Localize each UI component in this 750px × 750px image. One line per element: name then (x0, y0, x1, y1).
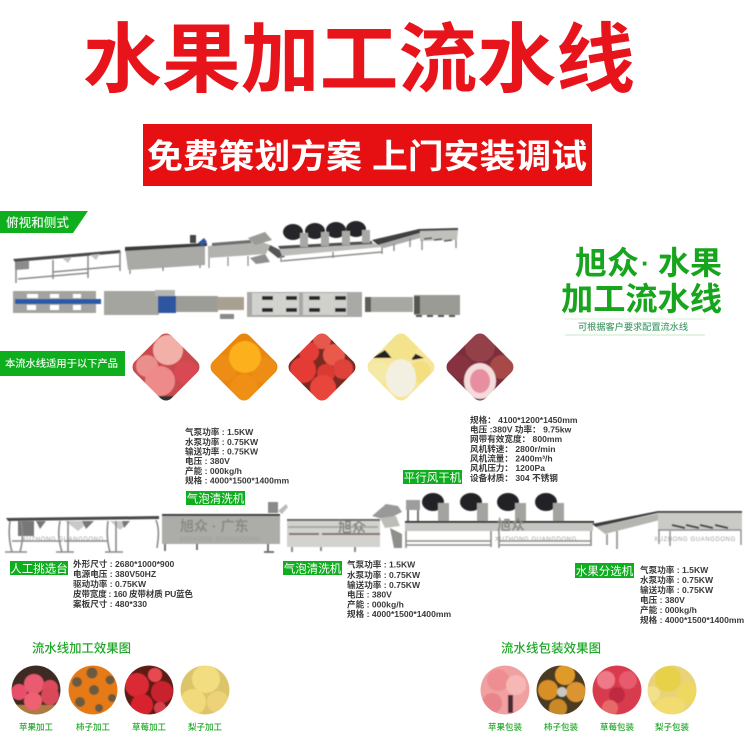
spec: bubble washer two: 输送功率 : 0.75KW (347, 579, 421, 590)
spec: fruit sorter: 规格 : 4000*1500*1400mm (640, 614, 745, 625)
heading: packaging results: 流水线包装效果图 (501, 640, 601, 656)
icon: oranges diamond (210, 334, 278, 400)
icon: packaged persimmons (536, 665, 586, 717)
spec: manual sorting table: 皮带宽度 : 160 皮带材质 PU蓝色 (73, 588, 193, 599)
captions: packaging: 苹果包装 (488, 722, 522, 732)
machine line plan view (13, 290, 460, 319)
brand heading (561, 245, 722, 335)
spec: parallel dryer: 风机压力： 1200Pa (470, 462, 545, 473)
inclined conveyor machine (592, 511, 662, 549)
brand heading: 加工流水线 (561, 281, 722, 317)
badge: manual sorting table: 人工挑选台 (10, 562, 68, 576)
plan: dryer (247, 292, 362, 317)
badge: applicable products (0, 351, 125, 376)
sorting table machine (5, 516, 159, 552)
spec: bubble washer two: 产能 : 000kg/h (347, 598, 404, 610)
spec: bubble washer one: 水泵功率 : 0.75KW (185, 436, 259, 447)
air dryer machine (405, 493, 594, 548)
spec: fruit sorter: 电压 : 380V (640, 594, 685, 605)
spec: fruit sorter: 气泵功率 : 1.5KW (640, 564, 709, 575)
captions: processing: 苹果加工 (19, 722, 53, 732)
captions: packaging (488, 722, 689, 732)
heading: processing results: 流水线加工效果图 (32, 640, 131, 656)
badge: bubble washer lower: 气泡清洗机 (284, 562, 342, 576)
icon: processed strawberries (124, 665, 174, 716)
spec: bubble washer two: 规格 : 4000*1500*1400mm (347, 608, 452, 619)
badge: bubble washer upper: 气泡清洗机 (187, 492, 245, 506)
icon: pears diamond (368, 334, 434, 400)
plan: washer (104, 290, 244, 319)
plan: sorting table (13, 291, 101, 313)
spec: parallel dryer: 网带有效宽度： 800mm (470, 433, 563, 444)
captions: packaging: 梨子包装 (655, 722, 689, 732)
red banner (143, 124, 592, 186)
icon: packaged pears (648, 666, 696, 714)
sorting table machine: XUZHONG GUANGDONG (22, 537, 104, 543)
spec: parallel dryer: 电压 :380V 功率： 9.75kw (470, 424, 572, 434)
title: 水果加工流水线 (83, 18, 635, 103)
spec: bubble washer two (347, 558, 452, 619)
icon: packaged strawberries (592, 665, 642, 716)
air dryer machine: 旭众 (497, 517, 525, 533)
captions: processing (19, 722, 222, 732)
badge: top and side views: 俯视和侧式 (6, 215, 69, 230)
spec: bubble washer one: 气泵功率 : 1.5KW (185, 426, 254, 437)
red banner: 免费策划方案 上门安装调试 (147, 139, 587, 176)
second washer machine (287, 504, 402, 552)
spec: manual sorting table: 驱动功率 : 0.75KW (73, 578, 147, 589)
washer (125, 235, 207, 274)
spec: bubble washer one (185, 426, 290, 486)
second washer machine: 旭众 (338, 519, 366, 535)
spec: bubble washer two: 电压 : 380V (347, 588, 392, 600)
fruit sorter machine: XUZHONG GUANGDONG (654, 537, 736, 543)
spec: bubble washer one: 输送功率 : 0.75KW (185, 446, 259, 456)
spec: parallel dryer: 规格： 4100*1200*1450mm (470, 414, 578, 425)
spec: parallel dryer: 风机流量： 2400m³/h (470, 452, 553, 464)
spec: fruit sorter: 水泵功率 : 0.75KW (640, 574, 714, 585)
spec: bubble washer two: 水泵功率 : 0.75KW (347, 569, 421, 580)
badge: top and side views (0, 211, 88, 233)
spec: manual sorting table: 案板尺寸 : 480*330 (73, 598, 147, 609)
bubble washer machine: 旭众 · 广东 (180, 518, 248, 534)
spec: bubble washer one: 规格 : 4000*1500*1400mm (185, 474, 290, 486)
spec: bubble washer one: 电压 : 380V (185, 455, 230, 466)
brand heading: 旭众 (575, 245, 639, 281)
fruit sorter machine (654, 511, 742, 546)
spec: fruit sorter: 输送功率 : 0.75KW (640, 584, 714, 595)
brand heading: 水果 (658, 245, 722, 281)
icon: peaches diamond (132, 334, 200, 400)
icon: figs diamond (446, 334, 514, 400)
bubble washer machine (162, 502, 288, 552)
side view production line (5, 493, 742, 552)
badge: parallel dryer: 平行风干机 (404, 470, 462, 484)
brand heading: · (641, 248, 650, 278)
icon: processed pears (180, 665, 230, 715)
spec: manual sorting table: 外形尺寸 : 2680*1000*900 (73, 558, 174, 569)
spec: parallel dryer: 设备材质： 304 不锈钢 (470, 472, 558, 483)
air dryer (268, 221, 382, 262)
air dryer machine: XUZHONG GUANGDONG (495, 537, 577, 543)
captions: packaging: 柿子包装 (544, 722, 578, 732)
icon: processed apples (11, 665, 61, 717)
icon: packaged apples (480, 665, 530, 715)
captions: processing: 梨子加工 (188, 722, 222, 732)
spec: fruit sorter: 产能 : 000kg/h (640, 604, 697, 615)
badge: fruit sorter: 水果分选机 (576, 564, 634, 578)
spec: parallel dryer (470, 414, 578, 483)
brand heading: 可根据客户要求配置流水线 (578, 321, 688, 332)
spec: bubble washer two: 气泵功率 : 1.5KW (347, 558, 416, 570)
spec: manual sorting table (73, 558, 193, 609)
bubble washer machine: XUZHONG GUANGDONG (179, 537, 261, 543)
plan: conveyor and sorter (365, 295, 460, 316)
sorting table (13, 250, 121, 283)
spec: manual sorting table: 电源电压 : 380V50HZ (73, 568, 156, 579)
inclined conveyor and sorter (372, 228, 458, 251)
captions: processing: 柿子加工 (76, 722, 110, 732)
second washer (208, 232, 272, 268)
badge: applicable products: 本流水线适用于以下产品 (5, 357, 118, 370)
captions: packaging: 草莓包装 (600, 722, 634, 732)
icon: processed persimmons (68, 665, 118, 715)
spec: parallel dryer: 风机转速： 2800r/min (470, 443, 556, 454)
captions: processing: 草莓加工 (132, 722, 166, 732)
spec: fruit sorter (640, 564, 745, 625)
icon: strawberries diamond (288, 334, 356, 400)
machine line perspective view (13, 221, 458, 283)
spec: bubble washer one: 产能 : 000kg/h (185, 465, 242, 476)
